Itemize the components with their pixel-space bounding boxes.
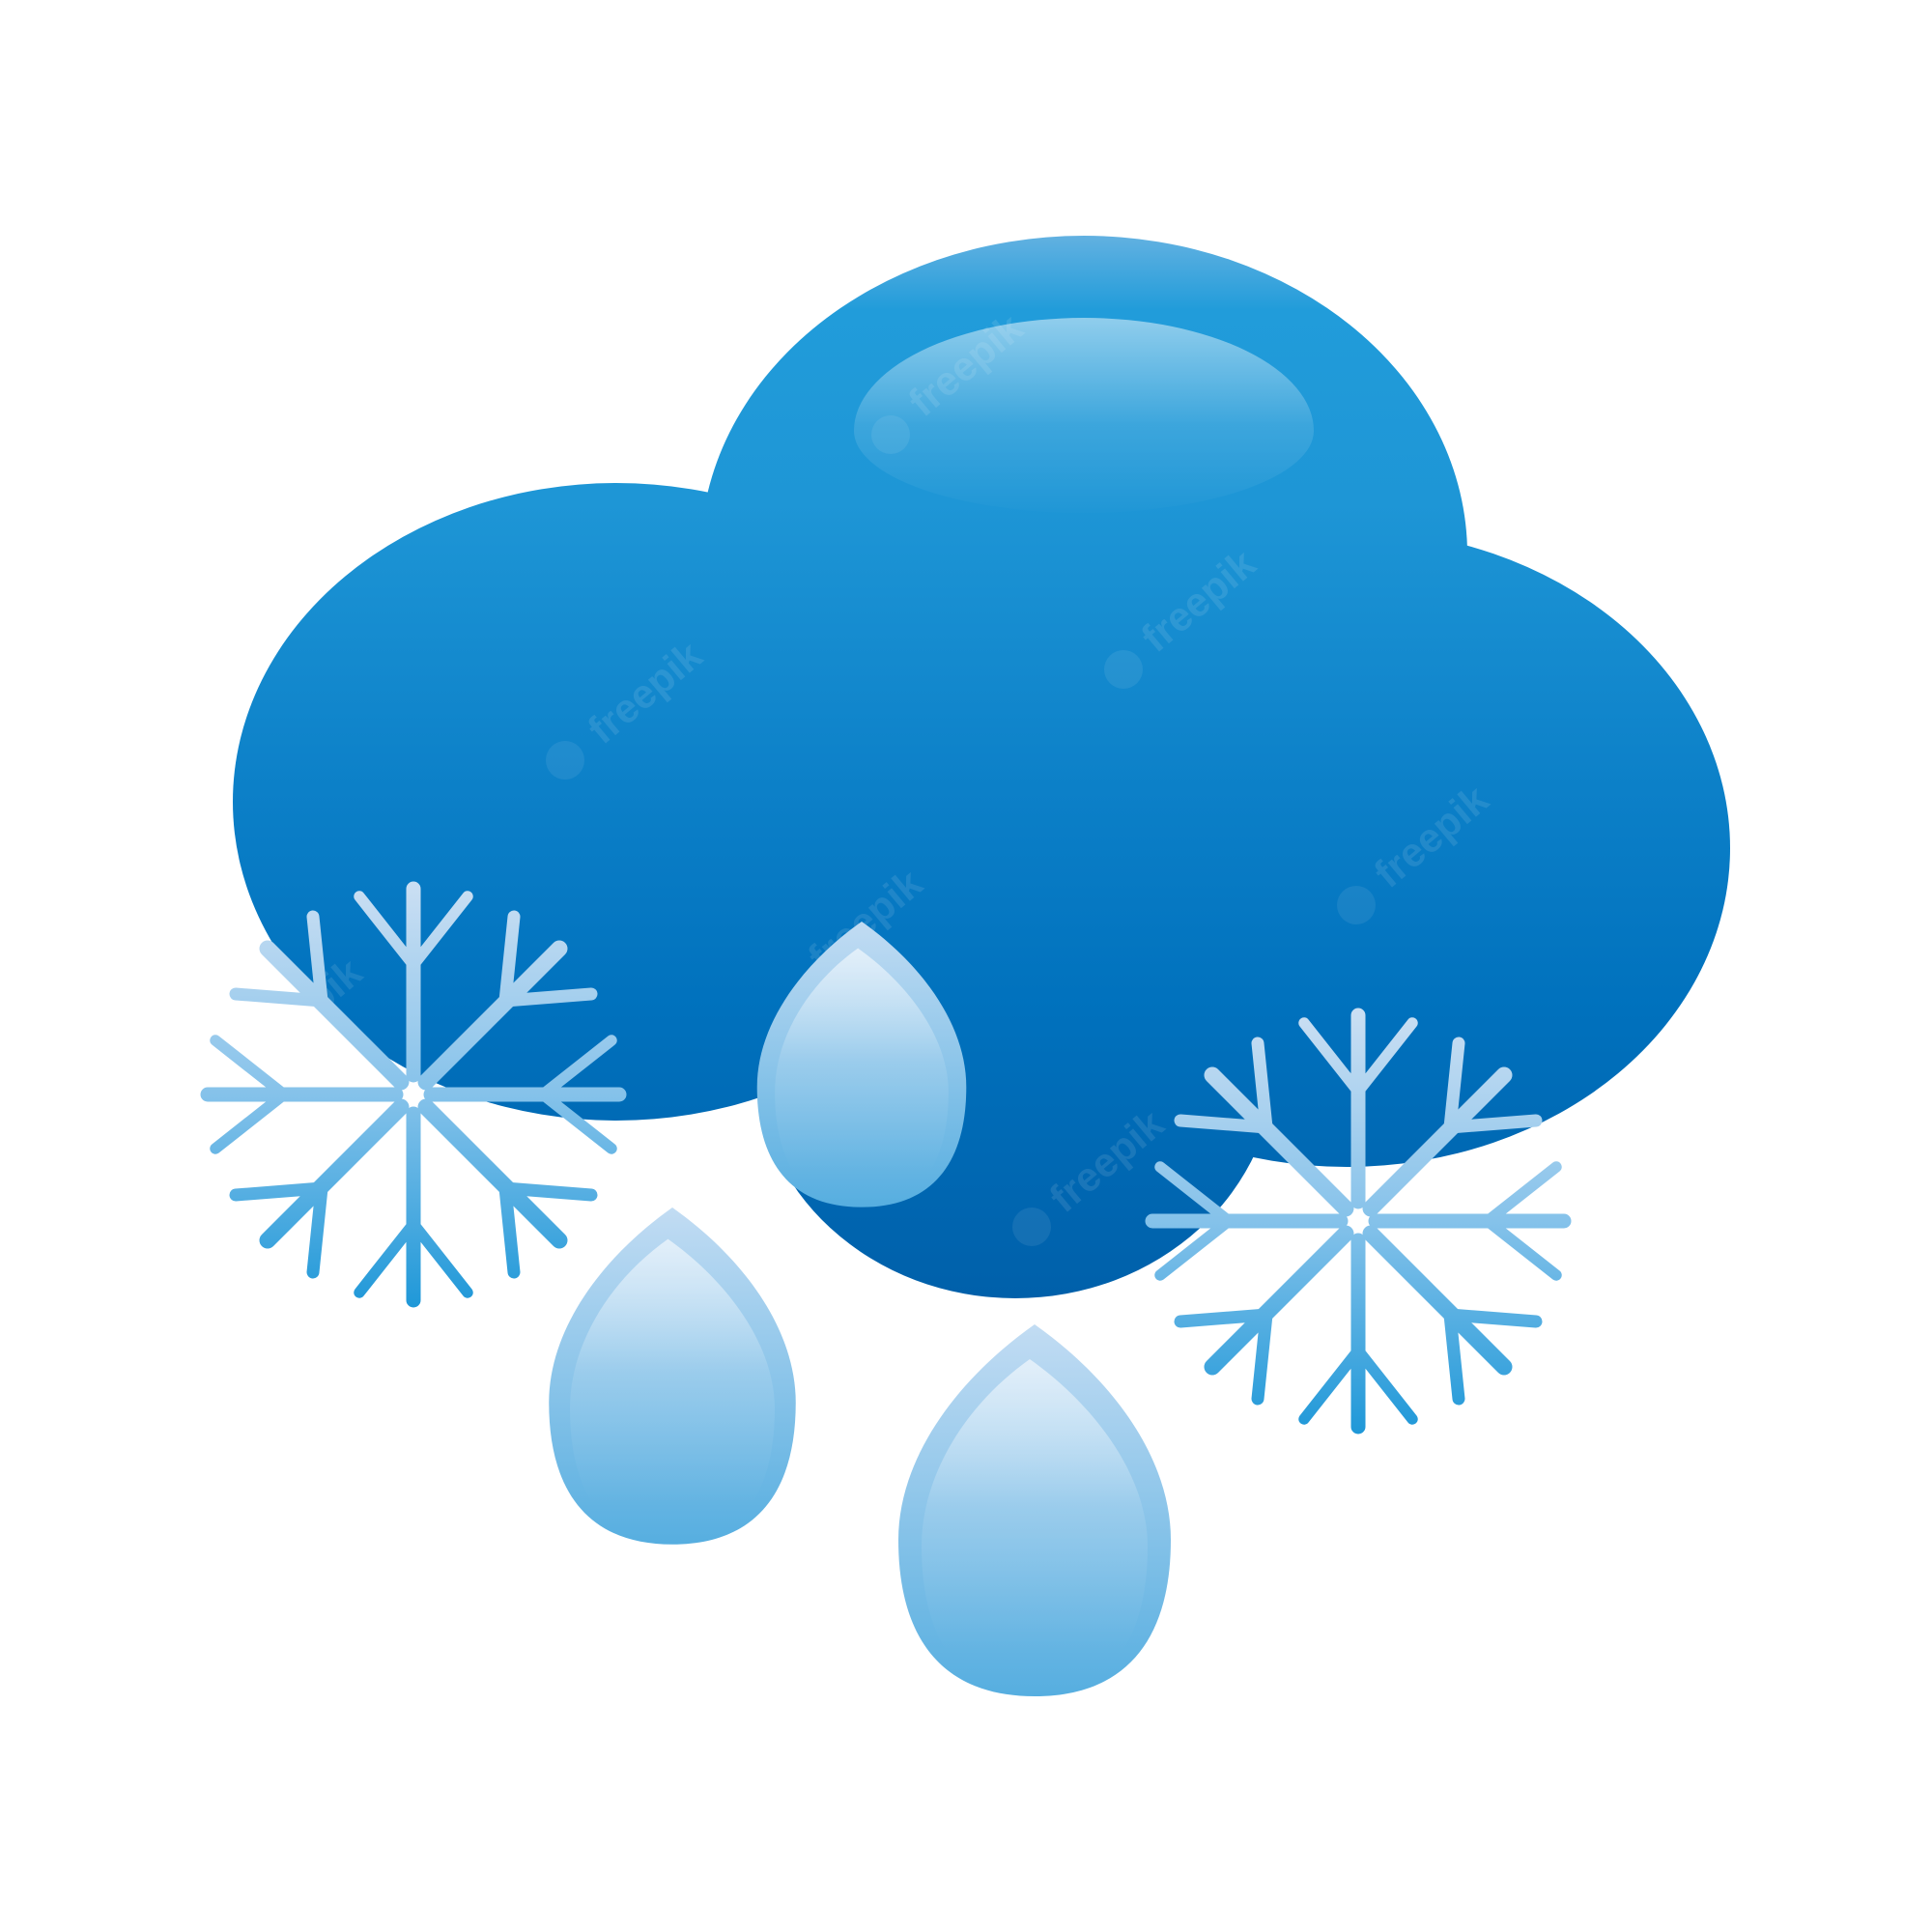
rain drop: lower right (898, 1324, 1171, 1696)
watermarks: freepik (1133, 540, 1264, 661)
watermarks: freepik (1041, 1100, 1173, 1221)
cloud (233, 236, 1730, 1298)
cloud highlight (854, 318, 1314, 513)
watermarks (240, 304, 1497, 1246)
watermarks: freepik (900, 304, 1032, 425)
rain drop: lower left (549, 1208, 796, 1545)
watermarks: freepik (800, 860, 931, 980)
watermarks: freepik (580, 632, 711, 753)
watermarks: freepik (1366, 776, 1497, 896)
rain drop: on cloud (757, 922, 966, 1208)
snowflake left (208, 889, 619, 1300)
snowflake right (1152, 1015, 1564, 1427)
watermarks: freepik (240, 949, 371, 1069)
